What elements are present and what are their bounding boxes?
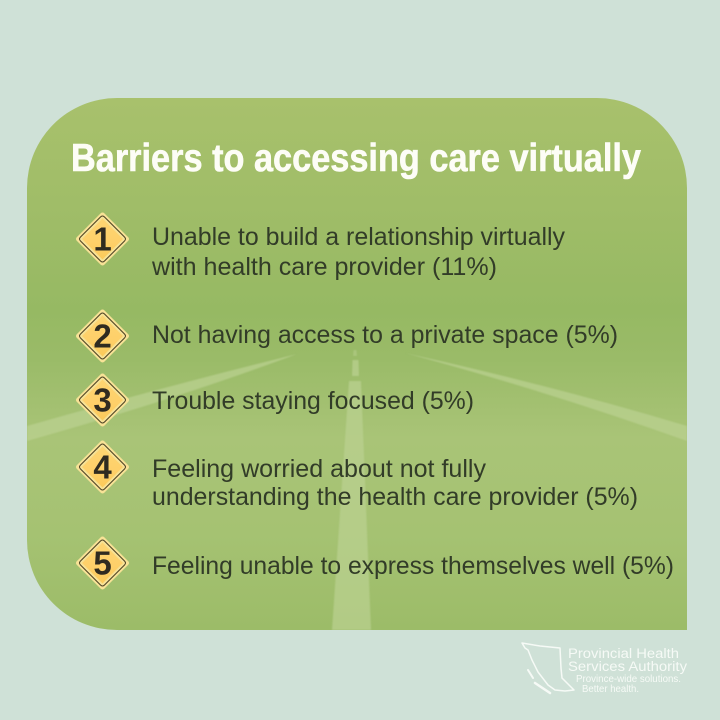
icon: road sign 4: 4: [93, 448, 112, 486]
logo: Provincial Health Services Authority: [522, 643, 687, 695]
text: item 4: [152, 455, 638, 511]
text: item 4: understanding the health care provider (5%): [152, 483, 638, 511]
text: item 3: Trouble staying focused (5%): [152, 387, 474, 415]
icon: road sign 5: 5: [93, 544, 112, 582]
logo wordmark: Services Authority: [568, 659, 687, 674]
text: item 1: Unable to build a relationship virtually: [152, 223, 565, 251]
text: item 2: Not having access to a private space (5%): [152, 321, 618, 349]
icon: British Columbia outline: [522, 643, 574, 693]
item 5: [78, 539, 674, 587]
icon: road sign 2: [78, 312, 126, 360]
icon: road sign 5: [78, 539, 126, 587]
text: item 5: Feeling unable to express themselves well (5%): [152, 552, 674, 580]
icon: road sign 3: [78, 376, 126, 424]
text: item 4: Feeling worried about not fully: [152, 455, 486, 483]
icon: road sign 4: [78, 443, 126, 491]
icon: road sign 3: 3: [93, 382, 112, 418]
item 2: [78, 312, 618, 360]
item 1: [78, 215, 565, 281]
logo wordmark: Province-wide solutions.: [576, 674, 681, 685]
text: item 1: [151, 223, 565, 281]
title: Barriers to accessing care virtually: [71, 137, 641, 180]
panel: barriers: [27, 98, 687, 630]
road illustration: [27, 350, 687, 630]
icon: road sign 1: 1: [93, 220, 112, 258]
logo wordmark: [568, 646, 687, 695]
logo wordmark: Provincial Health: [568, 646, 679, 661]
logo wordmark: Better health.: [582, 684, 639, 695]
text: item 1: with health care provider (11%): [151, 253, 497, 281]
item 4: [78, 443, 638, 511]
icon: road sign 1: [78, 215, 126, 263]
icon: road sign 2: 2: [93, 318, 112, 354]
item 3: [78, 376, 474, 424]
